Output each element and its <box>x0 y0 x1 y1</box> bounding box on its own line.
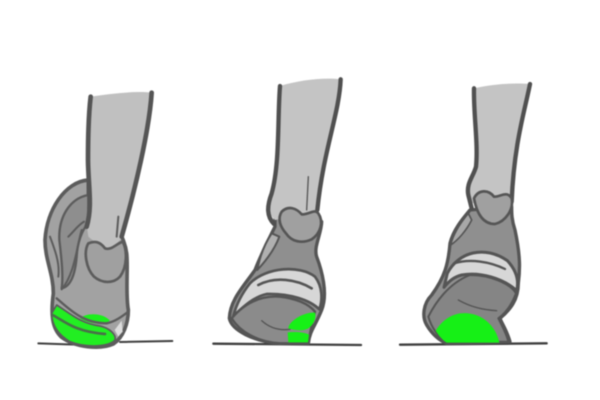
green bands <box>52 305 115 346</box>
tendon line <box>307 177 308 210</box>
ankle tendon strip <box>257 233 279 270</box>
toe tendon lines <box>50 222 84 277</box>
light straps <box>233 269 321 316</box>
green upper patch <box>288 313 315 330</box>
foot body <box>229 217 324 343</box>
ankle bone <box>280 208 321 242</box>
leg <box>469 84 530 203</box>
foot 1: heel raised with green forefoot bands <box>38 92 172 347</box>
green oval <box>80 314 110 324</box>
sole crease <box>458 300 497 311</box>
leg outlines <box>268 79 341 224</box>
foot body <box>424 207 520 343</box>
heel edge <box>57 298 128 323</box>
leg <box>269 79 341 220</box>
ankle crease <box>62 217 118 289</box>
white tip <box>115 321 123 337</box>
green lower patch <box>288 332 309 342</box>
green forefoot <box>436 313 499 343</box>
ground line 3 <box>400 343 547 345</box>
light straps <box>444 252 518 291</box>
ground line 1 <box>38 341 172 345</box>
strap crease <box>258 280 312 288</box>
ground line 2 <box>213 344 361 345</box>
strap crease <box>454 261 505 269</box>
ankle bone <box>474 191 512 224</box>
ankle bone <box>86 242 126 282</box>
sole <box>232 297 315 343</box>
foot body <box>45 180 128 347</box>
leg <box>87 92 152 249</box>
leg outlines <box>87 93 152 237</box>
inner arch shading <box>59 195 88 288</box>
leg outlines <box>468 84 530 208</box>
lower sole <box>428 275 516 343</box>
foot 2: mid stance with small green heel patches <box>213 79 361 345</box>
left ligament <box>451 213 472 245</box>
green band divider <box>53 315 105 334</box>
foot 3: flat stance with large green forefoot area <box>400 84 547 345</box>
sole crease <box>262 321 290 330</box>
